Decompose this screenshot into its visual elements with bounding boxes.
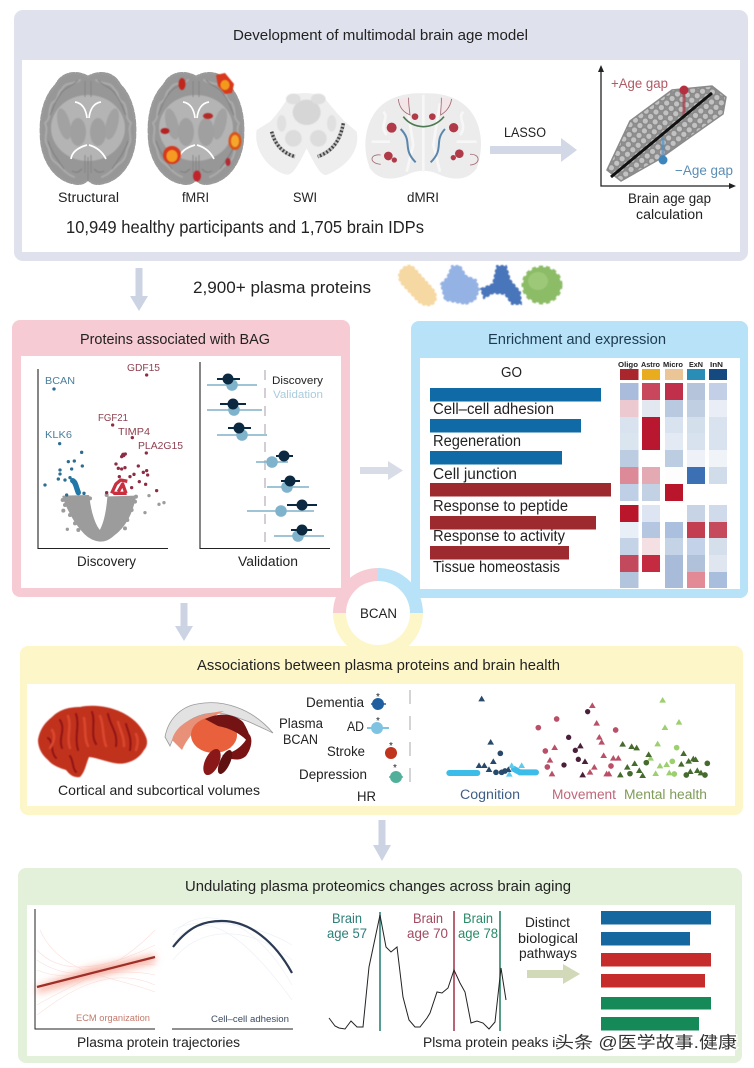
chart: forest plot validation: Validation <box>273 389 323 401</box>
chart: phenome associations scatter <box>449 696 710 802</box>
label: GO: GO <box>501 364 522 381</box>
label: plasma protein peaks: Plsma protein peaks in <box>423 1035 563 1050</box>
chart: volcano plot <box>38 362 183 548</box>
label: discovery: Discovery <box>77 554 136 569</box>
label: validation: Validation <box>238 554 298 569</box>
chart: volcano plot: KLK6 <box>45 429 72 441</box>
BCAN ring connector <box>333 568 423 658</box>
panel: proteins associated with BAG <box>12 320 350 597</box>
chart: phenome associations scatter: Mental health <box>624 787 707 802</box>
chart: plasma BCAN hazard ratios: * <box>393 763 397 774</box>
chart: phenome associations scatter: Cognition <box>460 787 520 802</box>
panel: associations between plasma proteins and brain health <box>20 646 743 815</box>
label: brain age gap calculation: calculation <box>636 207 703 222</box>
icon: cortical brain surface <box>38 706 147 777</box>
text: participants: 10,949 healthy participants and 1,705 brain IDPs <box>66 217 424 237</box>
label: cortical and subcortical volumes: Cortical and subcortical volumes <box>58 782 260 798</box>
chart: plasma BCAN hazard ratios: Depression <box>299 767 367 782</box>
chart: plasma BCAN hazard ratios: BCAN <box>283 732 318 747</box>
chart: plasma BCAN hazard ratios: AD <box>347 719 364 734</box>
chart: cell type expression heatmap <box>618 362 727 588</box>
chart: phenome associations scatter: Movement <box>552 787 616 802</box>
chart: volcano plot: GDF15 <box>127 362 160 374</box>
label: plasma protein trajectories: Plasma protein trajectories <box>77 1035 240 1050</box>
chart: plasma BCAN hazard ratios: HR <box>357 789 376 804</box>
chart: cell type expression heatmap: InN <box>710 362 723 369</box>
arrow: to enrichment panel <box>360 461 403 480</box>
chart: ECM organization trajectory <box>35 909 155 1029</box>
arrow: to pathways <box>527 964 580 984</box>
modality labels: dMRI <box>407 190 439 205</box>
text: distinct biological pathways: biological <box>518 930 578 946</box>
chart: GO bars: Response to activity <box>433 528 565 545</box>
chart: plasma BCAN hazard ratios <box>279 690 410 804</box>
icon: fMRI brain <box>149 73 243 184</box>
chart: plasma BCAN hazard ratios: Dementia <box>306 695 364 710</box>
chart: cell type expression heatmap: ExN <box>689 362 703 369</box>
chart: plasma protein peaks: Brain <box>413 910 443 926</box>
chart: brain age gap scatter: −Age gap <box>675 163 733 178</box>
chart: plasma BCAN hazard ratios: * <box>376 692 380 703</box>
arrow: LASSO: LASSO <box>504 125 546 140</box>
chart: brain age gap scatter <box>598 65 736 189</box>
heading: associations: Associations between plasma proteins and brain health <box>197 657 560 674</box>
chart: brain age gap scatter: +Age gap <box>611 76 668 91</box>
chart: cell-cell adhesion trajectory: Cell–cell adhesion <box>211 1014 289 1024</box>
heading: enrichment and expression: Enrichment and expression <box>488 332 666 348</box>
chart: plasma BCAN hazard ratios: * <box>376 716 380 727</box>
chart: plasma protein peaks <box>327 910 506 1031</box>
modality labels <box>58 190 439 205</box>
chart: volcano plot: FGF21 <box>98 412 128 424</box>
text: distinct biological pathways <box>518 914 578 961</box>
chart: volcano plot: PLA2G15 <box>138 440 183 452</box>
icon: SWI brainstem section <box>256 93 357 175</box>
icon: structural MRI brain <box>41 73 135 184</box>
chart: ECM organization trajectory: ECM organization <box>76 1013 150 1023</box>
icon: proteins <box>399 266 561 305</box>
label: brain age gap calculation: Brain age gap <box>628 191 711 206</box>
chart: plasma protein peaks: age 70 <box>407 925 448 941</box>
heading: development of model: Development of multimodal brain age model <box>233 27 528 44</box>
watermark: 头条 @医学故事.健康 <box>555 1033 737 1052</box>
chart: plasma protein peaks: Brain <box>332 910 362 926</box>
icon: dMRI coronal section <box>365 93 481 179</box>
chart: GO bars: Cell junction <box>433 466 517 483</box>
chart: cell type expression heatmap: Oligo <box>618 362 638 369</box>
icon: subcortical structures <box>165 703 273 778</box>
text: distinct biological pathways: pathways <box>519 945 577 961</box>
panel: undulating plasma proteomics changes <box>18 868 742 1063</box>
chart: plasma protein peaks: age 57 <box>327 925 367 941</box>
chart: volcano plot: BCAN <box>45 375 75 387</box>
panel: development of multimodal brain age model <box>14 10 748 261</box>
arrow: down to associations panel <box>175 603 193 641</box>
chart: plasma BCAN hazard ratios: * <box>389 741 393 752</box>
chart: cell type expression heatmap: Micro <box>663 362 683 369</box>
label: brain age gap calculation <box>628 191 711 222</box>
modality labels: fMRI <box>182 190 209 205</box>
modality labels: SWI <box>293 190 317 205</box>
arrow: down to proteins panel <box>130 268 148 311</box>
chart: cell type expression heatmap: Astro <box>641 362 660 369</box>
chart: GO bars <box>430 388 611 576</box>
chart: volcano plot: TIMP4 <box>118 426 150 438</box>
chart: plasma protein peaks: Brain <box>463 910 493 926</box>
chart: forest plot validation: Discovery <box>272 375 324 387</box>
chart: GO bars: Regeneration <box>433 433 521 450</box>
text: distinct biological pathways: Distinct <box>525 914 570 930</box>
heading: undulating proteomics: Undulating plasma proteomics changes across brain aging <box>185 878 571 895</box>
chart: plasma BCAN hazard ratios: Stroke <box>327 744 365 759</box>
BCAN ring connector: BCAN <box>360 606 397 621</box>
chart: forest plot validation <box>200 362 330 548</box>
chart: cell-cell adhesion trajectory <box>172 918 293 1029</box>
chart: plasma protein peaks: age 78 <box>458 925 498 941</box>
arrow: LASSO <box>490 125 577 162</box>
modality labels: Structural <box>58 190 119 205</box>
chart: pathway bars <box>601 911 711 1030</box>
arrow: down to proteomics panel <box>373 820 391 861</box>
chart: GO bars: Cell–cell adhesion <box>433 401 554 418</box>
panel: enrichment and expression <box>411 321 748 598</box>
chart: plasma BCAN hazard ratios: Plasma <box>279 716 323 731</box>
text: plasma proteins: 2,900+ plasma proteins <box>193 279 371 297</box>
chart: GO bars: Response to peptide <box>433 498 568 515</box>
heading: proteins associated with BAG: Proteins associated with BAG <box>80 332 270 348</box>
chart: GO bars: Tissue homeostasis <box>433 559 560 576</box>
